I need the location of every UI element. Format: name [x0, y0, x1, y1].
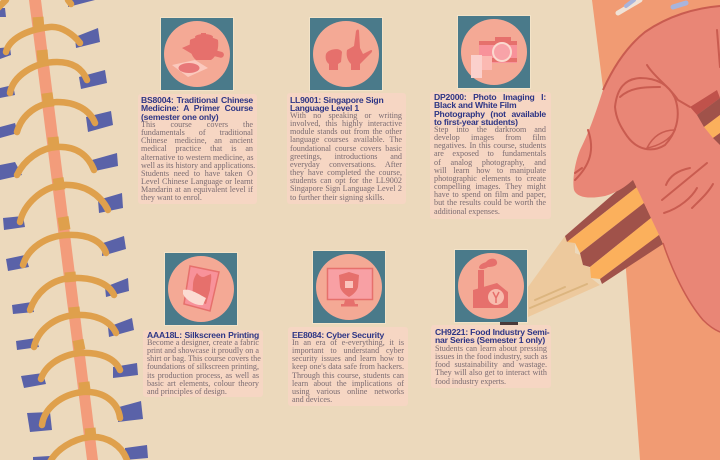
text block: basic art elements, colour theory	[147, 379, 259, 388]
sleeve highlight	[618, 0, 686, 13]
text block: language courses available. The	[290, 135, 402, 144]
text block: alternative to western medicine, as	[141, 153, 254, 162]
gold spiral rings	[0, 0, 127, 460]
text block: involved, this highly interactive	[290, 119, 402, 128]
spiral spine strip	[29, 0, 98, 460]
heading	[434, 92, 546, 127]
icon: sign language hands	[309, 17, 383, 91]
text block: module stands out from the other	[290, 127, 402, 136]
text block: negatives. In this course, students	[434, 141, 546, 150]
text block: Become a designer, create a fabric	[147, 338, 259, 347]
text block: students can opt for the LL9002	[290, 176, 402, 185]
text block: learn about the implications of	[292, 379, 404, 388]
text block: well as its history and applications.	[141, 161, 255, 170]
text block: This course covers the	[141, 120, 253, 129]
icon: food factory	[454, 249, 528, 323]
icon: silkscreen frame	[164, 252, 238, 326]
icon: camera and film	[457, 15, 531, 89]
blue binding holes	[0, 0, 148, 460]
panel: DP2000 course	[430, 92, 551, 219]
text block: compelling images. They might	[434, 182, 546, 191]
text block: print and showcase it proudly on a	[147, 346, 259, 355]
text block	[147, 338, 261, 396]
text block: With no speaking or writing	[290, 111, 402, 120]
text block: photographic elements to create	[434, 174, 546, 183]
pencil lead	[500, 322, 518, 325]
text block: have to spend on film and paper,	[434, 190, 546, 199]
text block: issues in the food industry, such as	[435, 352, 548, 361]
text block: food sustainability and wastage.	[435, 360, 547, 369]
text block: keep one's data safe from hackers.	[292, 362, 404, 371]
heading: EE8084: Cyber Security	[292, 330, 384, 340]
text block: important to understand cyber	[292, 346, 404, 355]
heading: Photography (not available	[434, 109, 546, 119]
text block: shirt or bag. This course covers the	[147, 354, 261, 363]
heading: DP2000: Photo Imaging I:	[434, 92, 546, 102]
heading: Language Level 1	[290, 103, 359, 113]
pencil tip	[500, 236, 600, 326]
panel: EE8084 course	[288, 327, 408, 406]
heading: CH9221: Food Industry Semi-	[435, 327, 549, 337]
text block: are exposed to fundamentals	[434, 149, 546, 158]
text block: Chinese medicine, an ancient	[141, 136, 253, 145]
text block: Students can learn about pressing	[435, 344, 547, 353]
text block: Singapore Sign Language Level 2	[290, 184, 402, 193]
icon: monitor with shield	[312, 250, 386, 324]
text block: In an era of e-everything, it is	[292, 338, 404, 347]
text block: using various online networks	[292, 387, 404, 396]
text block: Through this course, students can	[292, 371, 404, 380]
text block: fundamentals of traditional	[141, 128, 253, 137]
text block: and devices.	[292, 395, 332, 404]
heading	[141, 95, 253, 122]
pencil seen behind the thumb	[690, 90, 720, 115]
text block: and principles of design.	[147, 387, 227, 396]
heading	[290, 95, 384, 113]
text block: additional expenses.	[434, 207, 500, 216]
heading: Medicine: A Primer Course	[141, 103, 253, 113]
panel: BS8004 course	[138, 94, 257, 204]
text block	[434, 125, 546, 216]
text block: to further their signing skills.	[290, 193, 385, 202]
text block: they have completed the course,	[290, 168, 402, 177]
hand	[573, 6, 720, 332]
text block: its production process, as well as	[147, 371, 259, 380]
text block: Mandarin at an equivalent level if	[141, 185, 253, 194]
heading: AAA18L: Silkscreen Printing	[147, 330, 259, 340]
text block	[435, 344, 548, 386]
icon: teapot	[160, 17, 234, 91]
text block: Step into the darkroom and	[434, 125, 546, 134]
text block	[292, 338, 404, 404]
panel: LL9001 course	[287, 93, 406, 204]
gold ties on spine	[38, 17, 91, 438]
text block: security issues and learn how to	[292, 354, 404, 363]
heading: BS8004: Traditional Chinese	[141, 95, 253, 105]
finger creases and thumbnail lines	[575, 30, 720, 213]
text block: Level Chinese Language or learnt	[141, 177, 253, 186]
text block: foundations of silkscreen printing,	[147, 362, 259, 371]
text block: food industry experts.	[435, 377, 506, 386]
text block: Students need to have taken O	[141, 169, 253, 178]
text block: greetings, introductions and	[290, 152, 402, 161]
text block: everyday conversations. After	[290, 160, 402, 169]
heading	[435, 327, 550, 345]
text block: They will also get to interact with	[435, 368, 547, 377]
panel: CH9221 course	[431, 325, 551, 388]
heading: LL9001: Singapore Sign	[290, 95, 384, 105]
text block: they want to enrol.	[141, 193, 202, 202]
text block: foundational course covers basic	[290, 144, 402, 153]
panel: AAA18L course	[143, 330, 263, 397]
text block: but the results could be worth the	[434, 198, 546, 207]
text block: medical practice that is an	[141, 144, 253, 153]
text block: will learn how to manipulate	[434, 166, 546, 175]
heading: to first-year students)	[434, 117, 518, 127]
heading: nar Series (Semester 1 only)	[435, 335, 545, 345]
pencil	[500, 177, 663, 326]
text block	[290, 111, 402, 202]
arm	[592, 0, 720, 460]
text block: develop images from film	[434, 133, 546, 142]
text block	[141, 120, 255, 202]
heading: (semester one only)	[141, 112, 218, 122]
heading: Black and White Film	[434, 100, 516, 110]
text block: of analog photography, and	[434, 158, 546, 167]
